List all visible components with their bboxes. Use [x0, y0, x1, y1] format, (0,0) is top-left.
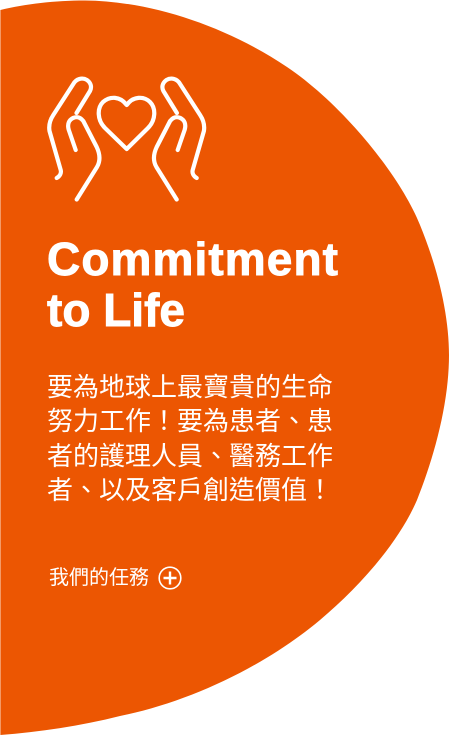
- title: to Life: [47, 284, 185, 336]
- mission text block: 努力工作！要為患者、患: [47, 406, 333, 436]
- mission text block: 要為地球上最寶貴的生命: [47, 372, 333, 402]
- title: [47, 233, 338, 336]
- icon: plus in circle: [159, 567, 181, 589]
- mission text block: 者的護理人員、醫務工作: [47, 441, 333, 471]
- title: Commitment: [47, 233, 338, 285]
- link label: 我們的任務: [49, 566, 149, 589]
- mission text block: [47, 372, 333, 505]
- mission text block: 者、以及客戶創造價值！: [47, 475, 333, 505]
- icon: hands holding heart: [49, 79, 204, 200]
